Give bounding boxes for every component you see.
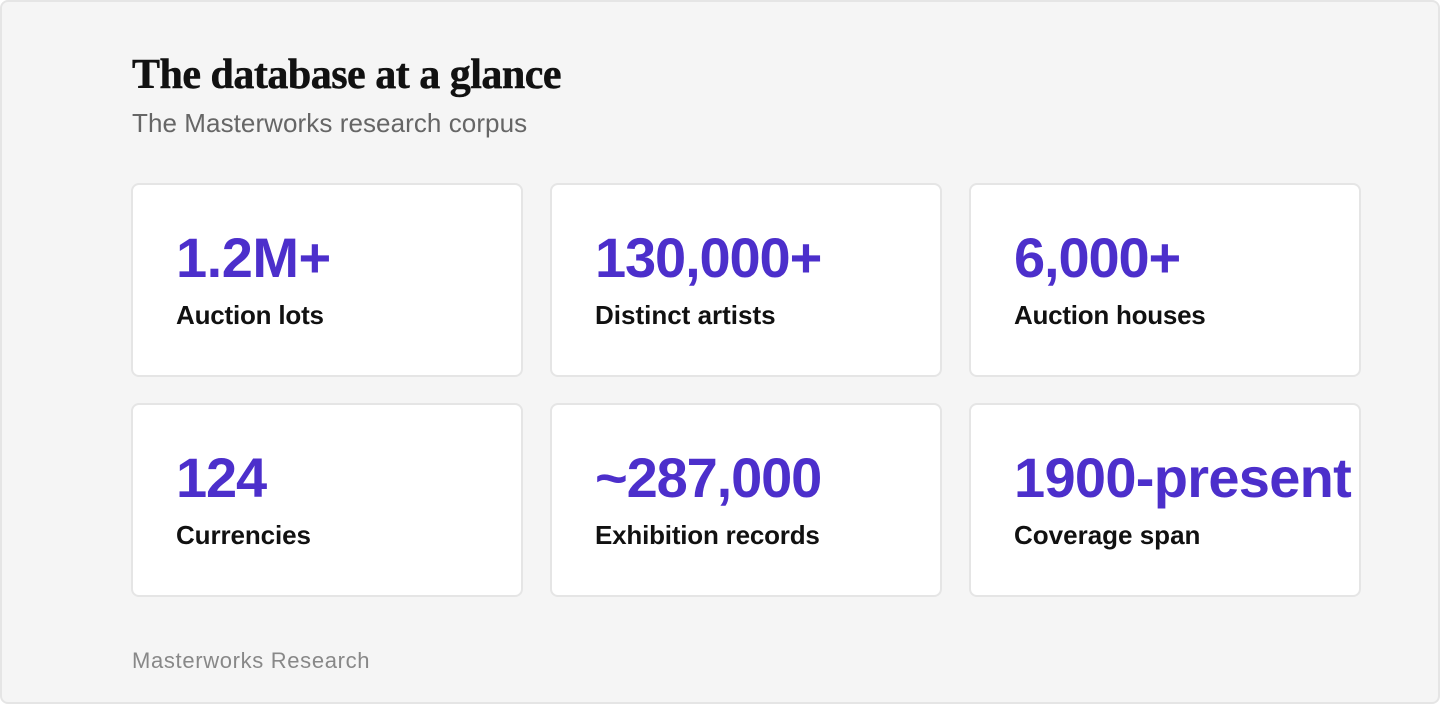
- stat card: exhibition records: [550, 403, 942, 597]
- stat card: distinct artists: [550, 183, 942, 377]
- stat label: Exhibition records: [595, 520, 820, 550]
- title: The database at a glance: [132, 52, 561, 98]
- stat label: Auction houses: [1014, 300, 1206, 330]
- stat value: 130,000+: [595, 226, 821, 289]
- stat card: currencies: [131, 403, 523, 597]
- stat card: auction lots: [131, 183, 523, 377]
- footer source: Masterworks Research: [132, 648, 370, 673]
- stat value: 1.2M+: [176, 226, 331, 289]
- stat card: coverage span: [969, 403, 1361, 597]
- subtitle: The Masterworks research corpus: [132, 108, 527, 138]
- stat value: 124: [176, 446, 266, 509]
- stat label: Coverage span: [1014, 520, 1200, 550]
- stat value: 6,000+: [1014, 226, 1180, 289]
- stat card: auction houses: [969, 183, 1361, 377]
- stat label: Distinct artists: [595, 300, 776, 330]
- stat value: ~287,000: [595, 446, 821, 509]
- stat label: Currencies: [176, 520, 311, 550]
- stat label: Auction lots: [176, 300, 324, 330]
- stat value: 1900-present: [1014, 446, 1351, 509]
